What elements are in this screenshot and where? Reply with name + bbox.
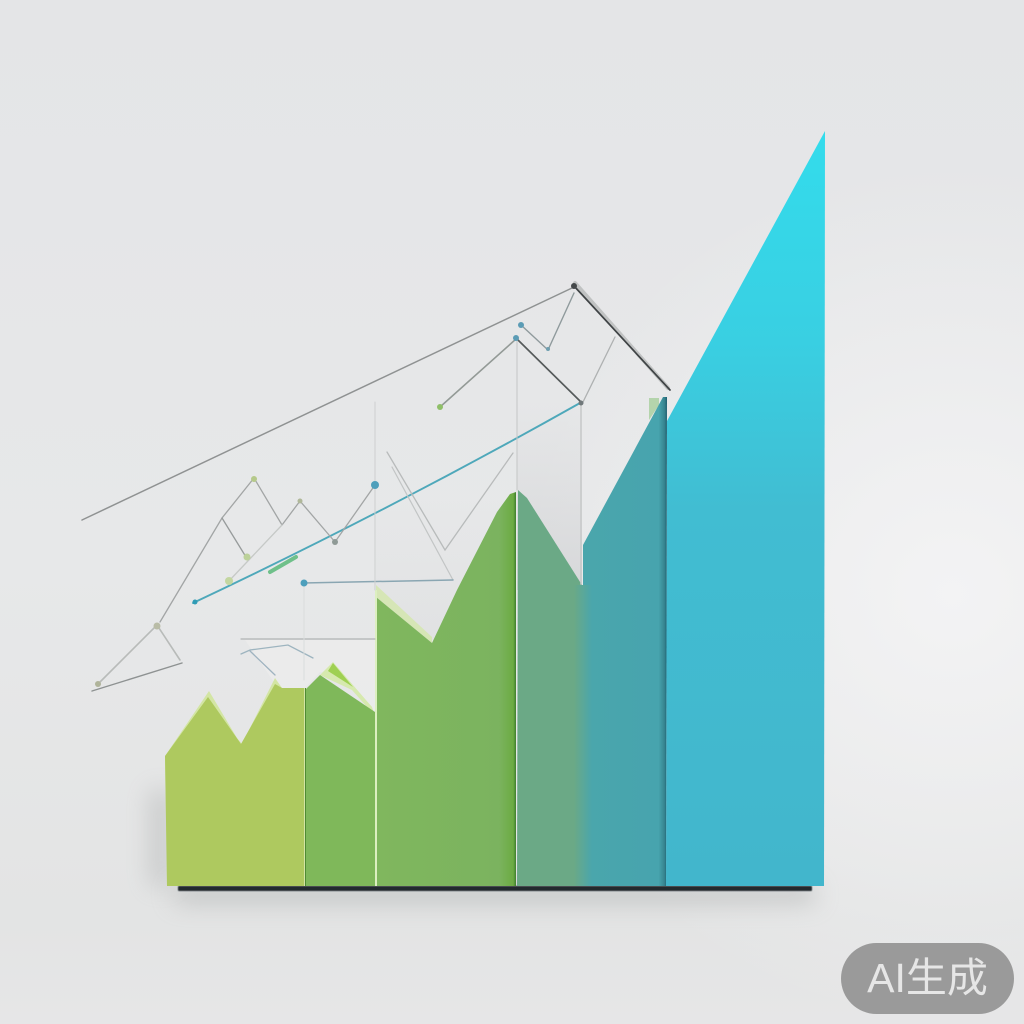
long grey line bbox=[82, 288, 572, 520]
line network bbox=[82, 283, 670, 691]
bar 1: lime bbox=[165, 678, 305, 886]
blue trend line bbox=[193, 403, 580, 603]
vertical guides bbox=[374, 402, 376, 590]
bar 4: sage bbox=[517, 490, 592, 886]
glass panels behind bars bbox=[245, 400, 582, 712]
bar 2: mid green bbox=[304, 662, 375, 886]
AI generated badge bbox=[841, 943, 1014, 1014]
middle zigzag bbox=[98, 625, 180, 684]
bar 3: green bbox=[375, 492, 516, 886]
ground shadow bbox=[150, 790, 815, 902]
bar 5: teal bbox=[583, 397, 667, 886]
line markers bbox=[95, 283, 584, 687]
AI generated badge: AI生成 bbox=[867, 955, 988, 1001]
bar 6: tall blue bbox=[666, 131, 825, 886]
